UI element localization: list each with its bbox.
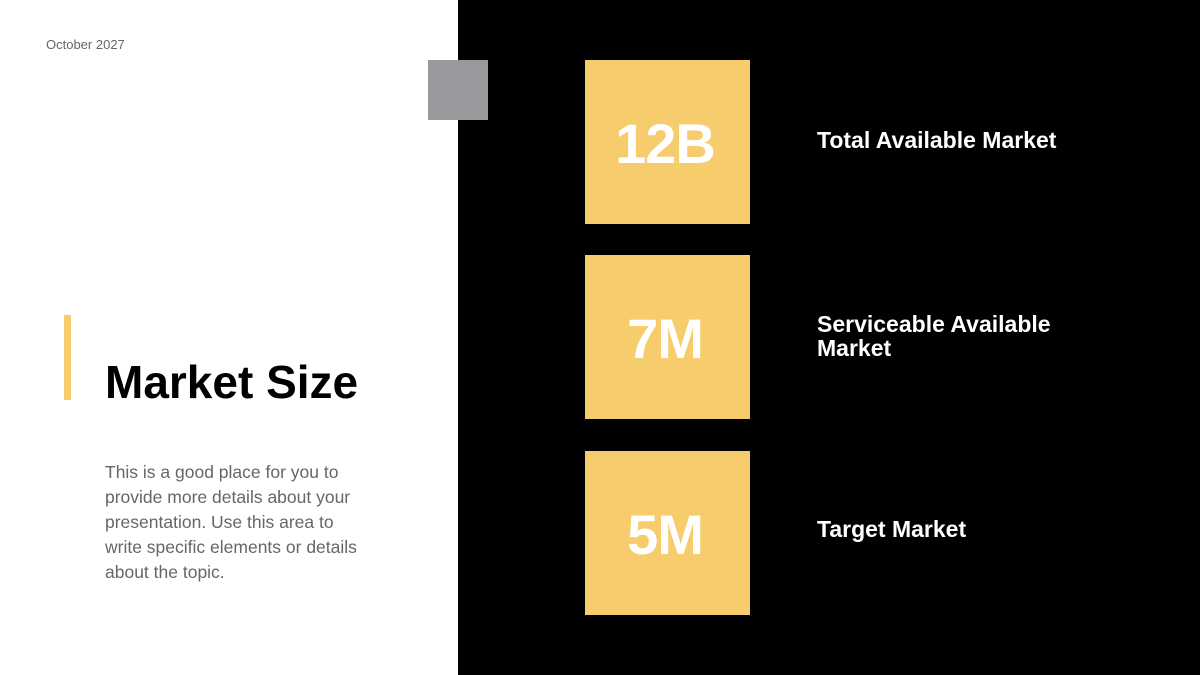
body text: This is a good place for you to <box>105 462 338 482</box>
label: SAM <box>817 311 1051 361</box>
stat: 12B <box>585 60 750 224</box>
stat: 12B: 12B <box>615 112 715 174</box>
decorative grey square <box>428 60 488 120</box>
stat: 5M: 5M <box>627 502 703 566</box>
accent bar <box>64 315 71 400</box>
body text <box>105 462 357 582</box>
date: October 2027 <box>46 37 125 52</box>
body text: write specific elements or details <box>105 537 357 557</box>
body text: provide more details about your <box>105 487 350 507</box>
title: Market Size <box>105 356 358 408</box>
label: target: Target Market <box>817 516 966 542</box>
label: SAM: Market <box>817 335 891 361</box>
panel: dark background <box>458 0 1200 675</box>
label: TAM: Total Available Market <box>817 127 1056 153</box>
stat: 7M <box>585 255 750 419</box>
body text: about the topic. <box>105 562 225 582</box>
label: SAM: Serviceable Available <box>817 311 1051 337</box>
stat: 7M: 7M <box>627 306 703 370</box>
stat: 5M <box>585 451 750 615</box>
body text: presentation. Use this area to <box>105 512 334 532</box>
